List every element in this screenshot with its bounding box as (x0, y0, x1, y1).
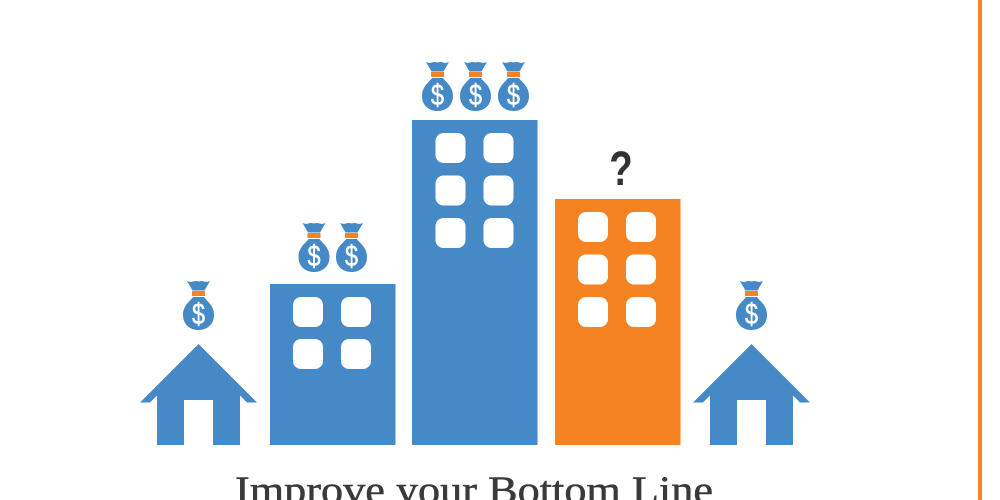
icon: money bag building one b: $ (345, 239, 358, 273)
icon: money bag left house (183, 281, 214, 331)
icon: money bag tall building c (498, 62, 529, 112)
icon: money bag tall building a: $ (431, 78, 444, 112)
icon: money bag tall building b (460, 62, 491, 112)
icon: money bag building one a (298, 223, 330, 273)
icon: money bag building one b (336, 223, 367, 273)
icon: money bag building one a: $ (307, 239, 321, 273)
building: orange unknown (555, 199, 680, 445)
orange side rule (978, 0, 982, 500)
icon: money bag right house: $ (745, 297, 758, 331)
building: tall three bag (412, 120, 538, 445)
icon: money bag tall building c: $ (507, 78, 520, 112)
icon: money bag right house (736, 281, 767, 331)
question mark: ? (609, 143, 633, 196)
building: two bag (270, 284, 396, 445)
icon: left house (140, 344, 257, 445)
icon: right house (693, 344, 810, 445)
icon: money bag tall building a (422, 62, 453, 112)
icon: money bag left house: $ (192, 297, 205, 331)
icon: money bag tall building b: $ (469, 78, 482, 112)
